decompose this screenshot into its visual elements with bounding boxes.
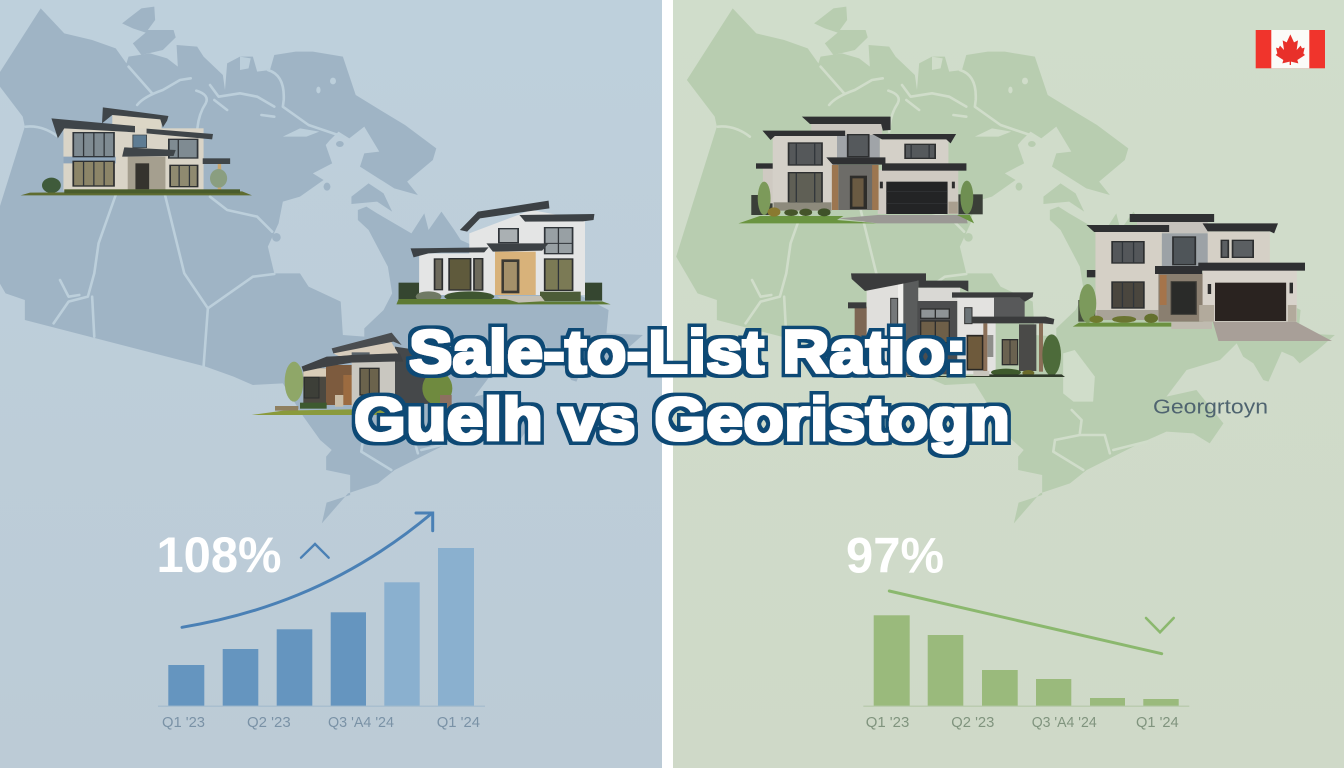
- axis labels: Q1 '23: [866, 714, 909, 731]
- value: 97%: 97%: [846, 528, 944, 584]
- panel background: [673, 0, 1344, 768]
- bars falling: [874, 615, 1179, 706]
- panel: Georgetown side: [673, 0, 1344, 768]
- icon: up chevron: [301, 544, 329, 558]
- panel background: [0, 0, 662, 768]
- axis labels: Q1 '23: [162, 714, 205, 731]
- house: centre: [252, 333, 452, 415]
- house: centre: [848, 273, 1065, 377]
- house: right: [1073, 214, 1332, 341]
- axis labels: Q2 '23: [247, 714, 291, 731]
- map of Canada, blue: [0, 7, 643, 523]
- axis labels: [162, 717, 480, 730]
- map of Canada, green: [676, 7, 1335, 523]
- axis labels: Q3 'A4 '24: [328, 714, 394, 731]
- bar chart: Guelh sale-to-list ratio: [156, 513, 485, 731]
- title: Sale-to-List Ratio:: [409, 318, 967, 386]
- bar chart: Georgetown sale-to-list ratio: [846, 528, 1189, 731]
- axis labels: Q1 '24: [437, 714, 480, 731]
- downward trend line: [889, 591, 1162, 654]
- icon: Canadian flag: [1256, 30, 1325, 68]
- panel: Guelph side: [0, 0, 662, 768]
- axis labels: Q2 '23: [951, 714, 994, 731]
- value: 108%: 108%: [156, 527, 282, 583]
- axis labels: [866, 717, 1178, 730]
- place label: Georgrtoyn: Georgrtoyn: [1153, 396, 1268, 418]
- axis labels: Q3 'A4 '24: [1032, 714, 1097, 731]
- bars rising: [168, 548, 474, 706]
- title: [354, 318, 1010, 453]
- house: top right: [396, 201, 611, 304]
- house: upper left: [738, 117, 983, 223]
- icon: down chevron: [1146, 618, 1174, 632]
- axis labels: Q1 '24: [1136, 714, 1179, 731]
- title: Guelh vs Georistogn: [354, 386, 1010, 453]
- house: top left: [21, 107, 252, 195]
- upward trend arrow: [182, 513, 433, 627]
